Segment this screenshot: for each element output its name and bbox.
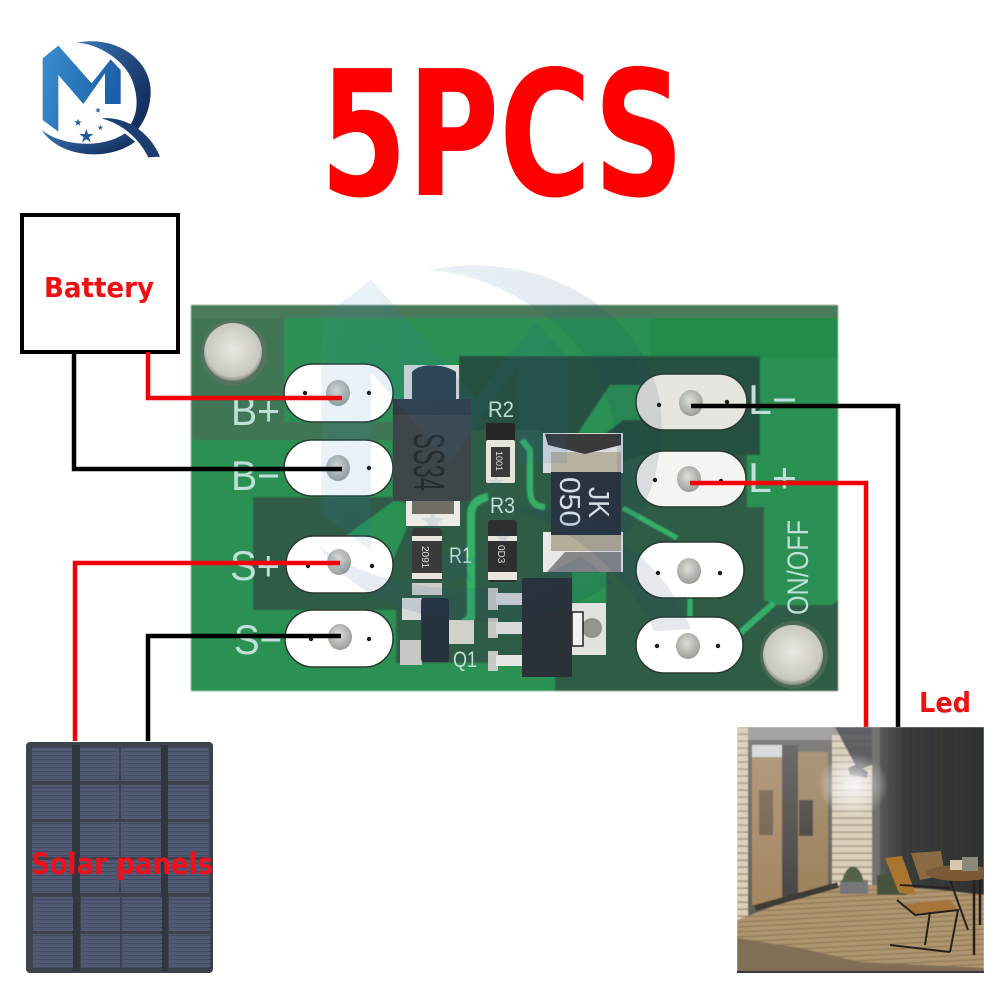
wire: solar negative xyxy=(148,636,341,741)
silkscreen labels: ON/OFF xyxy=(782,520,815,615)
resistor R3 xyxy=(488,520,517,582)
fuse JK 050 xyxy=(543,433,623,572)
transistor Q1 xyxy=(400,598,474,665)
resistor R1: 2091 xyxy=(419,546,430,569)
battery box xyxy=(22,215,178,352)
diode SS34: SS34 xyxy=(404,433,453,491)
silkscreen labels xyxy=(230,376,815,672)
silkscreen labels: Q1 xyxy=(453,647,477,672)
silkscreen labels: R1 xyxy=(449,543,472,568)
wire: battery positive xyxy=(148,352,342,398)
title: 5PCS: 5PCS xyxy=(320,34,684,237)
resistor R2 xyxy=(486,423,515,483)
wire: led negative xyxy=(691,406,898,727)
diode SS34 xyxy=(393,365,471,526)
wire: battery negative xyxy=(74,352,342,469)
fuse JK 050: 050 xyxy=(553,477,585,527)
resistor R3: 0D3 xyxy=(495,545,506,564)
board base xyxy=(191,306,838,691)
patio chairs xyxy=(885,851,968,952)
photo: patio lit by solar wall light xyxy=(737,727,994,973)
mounting holes xyxy=(201,320,828,689)
logo: MQ xyxy=(42,41,160,157)
fuse JK 050: JK xyxy=(582,487,614,519)
patio table xyxy=(926,857,984,955)
left pads xyxy=(284,364,393,667)
solar panel xyxy=(26,742,213,973)
regulator xyxy=(488,578,606,677)
silkscreen labels: R2 xyxy=(488,397,514,422)
silkscreen labels: S− xyxy=(234,616,282,663)
wire: solar positive xyxy=(75,563,340,741)
silkscreen labels: S+ xyxy=(230,542,280,589)
solar cells xyxy=(32,747,210,968)
label: led: Led xyxy=(919,686,971,719)
silkscreen labels: B+ xyxy=(231,387,280,434)
resistor R2: 1001 xyxy=(494,451,504,471)
resistor R1 xyxy=(412,528,442,595)
silkscreen labels: R3 xyxy=(490,493,515,518)
label: solar panels: Solar panels xyxy=(31,847,213,881)
right pads xyxy=(636,374,747,673)
watermark xyxy=(318,266,691,631)
circuit board xyxy=(191,266,838,691)
silkscreen labels: L− xyxy=(748,376,797,423)
silkscreen labels: B− xyxy=(231,452,280,499)
silkscreen labels: L+ xyxy=(748,454,797,501)
wire: led positive xyxy=(690,483,866,727)
battery box: Battery xyxy=(44,271,154,304)
pad holes xyxy=(303,380,729,659)
